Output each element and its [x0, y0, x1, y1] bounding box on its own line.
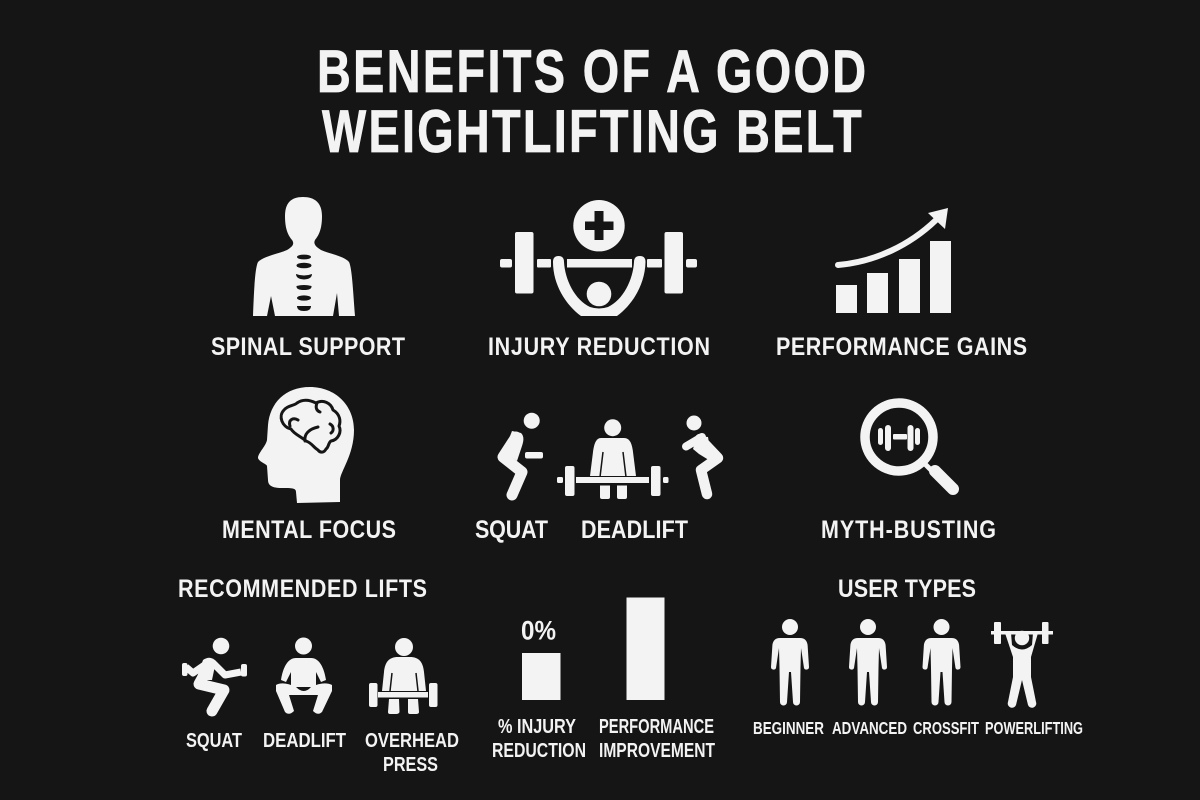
- panel: performance gains: [776, 208, 1027, 360]
- icon: squat with dumbbells: [182, 638, 247, 711]
- heading: recommended lifts: RECOMMENDED LIFTS: [178, 574, 427, 602]
- bar: injury reduction: [522, 653, 560, 700]
- panel: squat and deadlift: [475, 413, 718, 543]
- panel: user types: [753, 574, 1083, 738]
- label: % injury reduction: [492, 716, 586, 762]
- icon: powerlifting figure: [991, 622, 1053, 708]
- panel: myth-busting: [821, 403, 996, 543]
- icon: beginner figure: [771, 619, 809, 706]
- panel: injury reduction: [488, 200, 710, 360]
- panel: recommended lifts: [178, 574, 459, 776]
- label: powerlifting: POWERLIFTING: [985, 718, 1083, 738]
- icon: rising bars and arrow: [836, 208, 951, 313]
- title: [317, 38, 866, 165]
- label: overhead press: PRESS: [383, 754, 438, 776]
- title: WEIGHTLIFTING BELT: [322, 98, 862, 165]
- label: % injury reduction: REDUCTION: [492, 740, 586, 762]
- label: injury reduction: INJURY REDUCTION: [488, 332, 710, 360]
- label: myth-busting: MYTH-BUSTING: [821, 515, 996, 543]
- label: performance improvement: [599, 716, 715, 762]
- label: crossfit: CROSSFIT: [913, 718, 979, 738]
- label: deadlift: DEADLIFT: [263, 730, 346, 752]
- icon: barbell with medical cross: [500, 200, 697, 316]
- label: squat: SQUAT: [475, 515, 548, 543]
- label: advanced: ADVANCED: [832, 718, 907, 738]
- bar: performance improvement: [626, 598, 664, 700]
- icon: squat figure right: [686, 416, 718, 494]
- icon: advanced figure: [849, 619, 887, 706]
- icon: magnifier over dumbbell: [865, 403, 953, 489]
- icon: torso with spine: [253, 197, 355, 316]
- label: overhead press: [365, 730, 459, 776]
- icon: squat figure left: [503, 413, 543, 495]
- label: deadlift: DEADLIFT: [581, 515, 688, 543]
- value: 0%: 0%: [521, 616, 556, 646]
- heading: user types: USER TYPES: [838, 574, 976, 602]
- label: performance improvement: IMPROVEMENT: [599, 740, 715, 762]
- label: mental focus: MENTAL FOCUS: [222, 515, 396, 543]
- icon: crossfit figure: [922, 619, 960, 706]
- label: overhead press: OVERHEAD: [365, 730, 459, 752]
- icon: head with brain: [258, 387, 354, 503]
- label: % injury reduction: % INJURY: [498, 716, 577, 738]
- panel: spinal support: [211, 197, 405, 360]
- label: performance improvement: PERFORMANCE: [599, 716, 714, 738]
- title: BENEFITS OF A GOOD: [317, 38, 866, 105]
- label: performance gains: PERFORMANCE GAINS: [776, 332, 1027, 360]
- icon: deadlift stance: [276, 638, 332, 714]
- label: spinal support: SPINAL SUPPORT: [211, 332, 405, 360]
- panel: mental focus: [222, 387, 396, 543]
- icon: overhead press figure: [369, 638, 438, 714]
- label: squat: SQUAT: [186, 730, 242, 752]
- label: beginner: BEGINNER: [753, 718, 824, 738]
- panel: bar chart: [492, 598, 715, 762]
- icon: deadlift figure with barbell: [557, 419, 668, 499]
